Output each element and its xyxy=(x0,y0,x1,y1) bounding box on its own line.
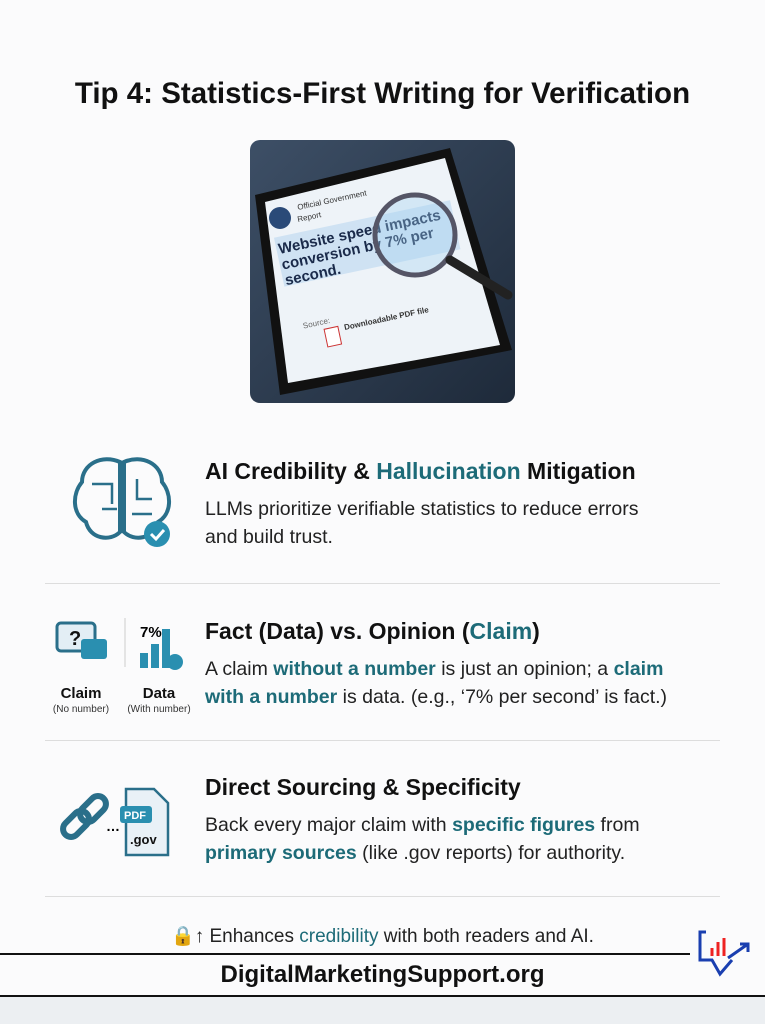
section 1: AI credibility xyxy=(72,457,638,548)
hero image: tablet with magnifier: Report xyxy=(297,210,323,224)
section 3: direct sourcing xyxy=(60,774,640,864)
icon: claim vs data: (No number) xyxy=(53,704,109,715)
body: LLMs prioritize verifiable statistics to reduce errors and build trust. xyxy=(205,498,638,548)
hero image: tablet with magnifier: second. xyxy=(283,261,342,289)
hero image: tablet with magnifier: Official Government xyxy=(297,188,368,212)
icon: link and pdf: .gov xyxy=(130,832,157,847)
icon: brain xyxy=(72,457,172,547)
icon: link and pdf: PDF xyxy=(124,810,146,822)
hero image: tablet with magnifier: Website speed impacts xyxy=(277,207,442,258)
heading: Fact (Data) vs. Opinion (Claim) xyxy=(205,618,540,644)
footer brand: DigitalMarketingSupport.org xyxy=(220,961,544,988)
heading: AI Credibility & Hallucination Mitigation xyxy=(205,458,636,484)
icon: claim vs data: 7% xyxy=(140,624,162,641)
hero image: tablet with magnifier: Source: xyxy=(302,316,331,331)
hero image: tablet with magnifier: conversion by 7% per xyxy=(280,225,435,274)
title: Tip 4: Statistics-First Writing for Verification xyxy=(75,77,690,110)
heading: Direct Sourcing & Specificity xyxy=(205,774,521,800)
icon: claim vs data xyxy=(53,618,191,715)
icon: link and pdf: … xyxy=(106,818,120,834)
icon: link and pdf xyxy=(60,788,170,856)
icon: claim vs data: (With number) xyxy=(127,704,191,715)
section 2: fact vs opinion xyxy=(53,618,667,715)
body: Back every major claim with specific figures from primary sources (like .gov reports) for authority. xyxy=(205,814,640,864)
icon: claim vs data: Data xyxy=(143,685,175,702)
callout: credibility: 🔒↑ Enhances credibility with both readers and AI. xyxy=(171,926,594,947)
icon: logo xyxy=(698,930,750,977)
icon: claim vs data: Claim xyxy=(61,685,101,702)
body: A claim without a number is just an opinion; a claim with a number is data. (e.g., ‘7% per second’ is fact.) xyxy=(205,658,667,708)
icon: claim vs data: ? xyxy=(69,628,81,650)
hero image: tablet with magnifier xyxy=(250,140,515,403)
hero image: tablet with magnifier: Downloadable PDF file xyxy=(343,305,430,332)
